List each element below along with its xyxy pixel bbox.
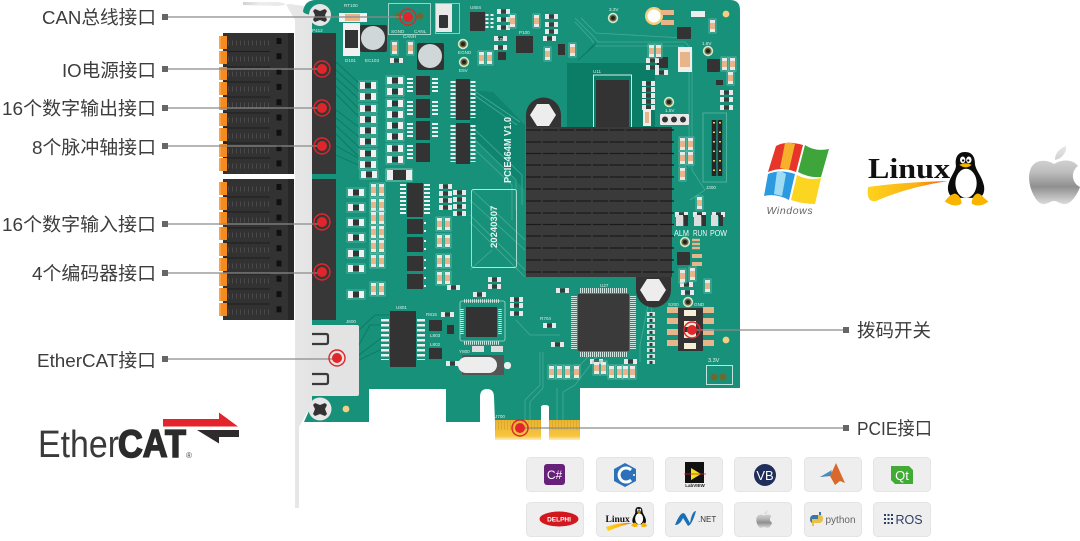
small chips and components top: R108 (494, 37, 505, 42)
ethernet PHY section: L802 (430, 342, 441, 347)
board (303, 0, 740, 438)
logo: Apple (1029, 146, 1080, 204)
PCIe controller card illustration (219, 0, 740, 508)
logo: EtherCAT: CAT (118, 423, 186, 466)
tile: ROS (874, 502, 930, 536)
heatsink (526, 98, 674, 308)
logo: Windows (764, 143, 829, 217)
ethernet PHY section: R815 (426, 312, 437, 317)
label: 拨码开关: 拨码开关 (857, 320, 931, 341)
silk text: 20240307 (489, 206, 500, 248)
DIP switch: GND (694, 302, 705, 307)
leader line: EtherCAT port (162, 350, 345, 366)
logo: EtherCAT (38, 412, 239, 466)
leader line: 16 digital inputs (162, 214, 330, 230)
tile: Linux (596, 502, 654, 536)
label: 8个脉冲轴接口: 8个脉冲轴接口 (32, 137, 156, 158)
right side components: 3.3V (708, 358, 720, 364)
tile: Qt: Qt (895, 468, 909, 483)
tile: VB: VB (756, 468, 774, 483)
ethernet jack J600 (312, 319, 359, 396)
tile: C# (526, 458, 584, 492)
top-left power components: RT100 (344, 3, 358, 8)
tile: LabVIEW: LabVIEW (685, 483, 705, 488)
main FPGA chip: R704 (540, 316, 551, 321)
logo: Windows: Windows (766, 205, 813, 217)
CAN terminal outline (388, 4, 430, 39)
label: PCIE接口: PCIE接口 (857, 418, 932, 439)
gold edge connector (495, 414, 580, 440)
small chips and components top: 1.8V (702, 41, 712, 46)
digital input components (347, 183, 466, 299)
small chips and components top (343, 5, 736, 412)
silk text: PCIE464M V1.0 (502, 117, 514, 183)
ethernet jack J600: J600 (346, 319, 356, 324)
chip U11 and resistors: 1.5V (665, 108, 675, 113)
tile: Delphi: DELPHI (547, 516, 571, 524)
screws: P412 (312, 28, 323, 33)
mounting bracket (243, 2, 312, 508)
small chips and components top: U11 (593, 69, 602, 74)
logo: Linux with penguin: Linux (868, 154, 950, 185)
circuit traces (336, 18, 705, 420)
screws (308, 4, 332, 420)
big connector: terminal blocks (219, 33, 294, 320)
label: 16个数字输入接口: 16个数字输入接口 (2, 214, 156, 235)
tile: LabVIEW (666, 458, 722, 492)
tile: C#: C# (547, 468, 562, 482)
leader line: IO power port (162, 61, 330, 77)
gold edge connector: J700 (495, 414, 505, 419)
tile: Delphi (526, 502, 584, 536)
main FPGA chip (540, 283, 651, 379)
tile: Python (804, 502, 862, 536)
top-left power components: D101 (345, 58, 356, 63)
leader line: 16 digital outputs (162, 100, 330, 116)
tile: Qt (874, 458, 930, 492)
power switch (436, 4, 460, 34)
leader line: CAN bus port (162, 9, 416, 25)
digital output resistors and chips (359, 76, 473, 181)
tile: Apple (734, 502, 792, 536)
small chips and components top: EGND (458, 50, 472, 55)
right side components: RUN (693, 228, 707, 238)
small chips and components top: 3.3V (609, 7, 619, 12)
leader line: 4 encoders (162, 264, 330, 280)
tile: ROS: ROS (896, 513, 923, 527)
right side components: J300 (706, 185, 716, 190)
logo: EtherCAT: Ether (38, 424, 119, 466)
silk text (472, 117, 516, 268)
small chips and components top: P100 (519, 30, 530, 35)
ethernet PHY section: Y800 (459, 349, 470, 354)
ethernet PHY section: U801 (396, 305, 407, 310)
label: 4个编码器接口: 4个编码器接口 (32, 263, 156, 284)
label: CAN总线接口: CAN总线接口 (42, 7, 156, 28)
leader line: PCIE port (512, 420, 849, 436)
software compatibility tiles (526, 458, 930, 536)
right side components: POW (710, 228, 727, 238)
logo: EtherCAT: ® (186, 451, 192, 460)
small chips and components top: E5V (459, 68, 469, 73)
label: 16个数字输出接口: 16个数字输出接口 (2, 98, 156, 119)
main FPGA chip: U27 (600, 283, 609, 288)
right side components (674, 113, 732, 384)
chip U11 and resistors (594, 75, 689, 129)
tile: VB (734, 458, 792, 492)
leader line: DIP switch (684, 322, 849, 338)
tile: Linux: Linux (606, 515, 630, 525)
DIP switch: S200 (668, 302, 679, 307)
tile: Python: python (826, 514, 856, 526)
tile: MATLAB (804, 458, 862, 492)
dark copper zones (567, 63, 655, 127)
tile: .NET: .NET (698, 515, 716, 524)
DIP switch (667, 297, 714, 351)
small chips and components top: U804 (470, 5, 481, 10)
CAN terminal outline: CANH (403, 34, 416, 39)
tile: .NET (666, 502, 722, 536)
top-left power components (339, 3, 444, 70)
ethernet PHY section (385, 277, 523, 375)
right side components: ALM (674, 228, 689, 238)
header strip on board (312, 33, 336, 320)
label: EtherCAT接口: EtherCAT接口 (37, 350, 156, 371)
leader line: 8 pulse axes (162, 138, 330, 154)
top-left power components: EC103 (365, 58, 379, 63)
ethernet PHY section: L803 (430, 333, 441, 338)
logo: Linux with penguin (868, 152, 988, 205)
CAN terminal outline: CANL (414, 29, 427, 34)
label: IO电源接口: IO电源接口 (62, 60, 156, 81)
tile: C++ (596, 458, 654, 492)
CAN terminal outline: SGND (391, 29, 405, 34)
